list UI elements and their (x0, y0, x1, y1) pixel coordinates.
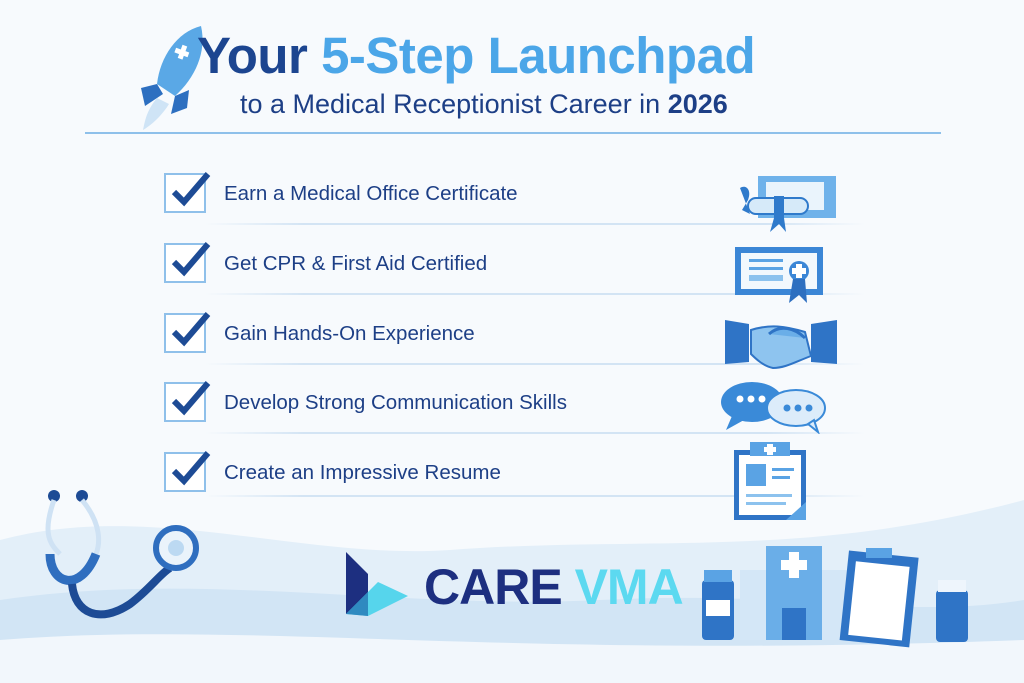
step 1: Earn a Medical Office Certificate (224, 182, 518, 205)
subtitle: to a Medical Receptionist Career in 2026 (240, 89, 728, 119)
icon: handshake (725, 320, 837, 369)
step 2 (164, 242, 487, 283)
logo: CARE VMA: CARE VMA (424, 559, 683, 615)
step 5: Create an Impressive Resume (224, 461, 501, 484)
step 3: Gain Hands-On Experience (224, 322, 475, 345)
step 1 (164, 172, 518, 213)
icon: rocket (141, 26, 202, 130)
logo: CARE VMA (346, 552, 683, 616)
step 2: Get CPR & First Aid Certified (224, 252, 487, 275)
step 4 (164, 381, 567, 422)
icon: chat bubbles (721, 382, 826, 434)
hospital illustration (702, 546, 968, 648)
icon: resume (734, 442, 806, 520)
icon: stethoscope (46, 490, 199, 618)
step 4: Develop Strong Communication Skills (224, 391, 567, 414)
icon: certificate (735, 247, 823, 303)
icon: diploma (740, 176, 836, 232)
step 3 (164, 312, 475, 353)
step 5 (164, 451, 501, 492)
title: Your 5-Step Launchpad (197, 27, 755, 84)
